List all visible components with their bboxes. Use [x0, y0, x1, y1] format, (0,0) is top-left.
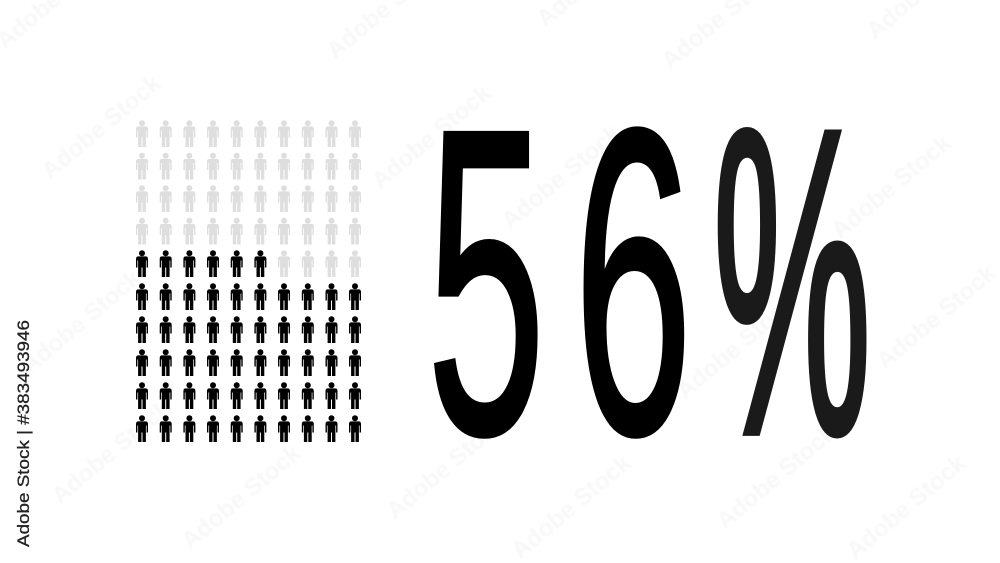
row 4 grey [136, 218, 361, 244]
watermark pattern: Adobe Stock [507, 449, 637, 563]
watermark pattern: Adobe Stock [382, 409, 512, 525]
row 10 black [136, 415, 361, 442]
watermark pattern: Adobe Stock [672, 289, 802, 405]
row 7 black [136, 316, 361, 343]
watermark pattern: Adobe Stock [842, 449, 972, 563]
row 6 black [136, 283, 361, 310]
watermark pattern: Adobe Stock [367, 79, 497, 195]
digit 6: 6 [574, 41, 692, 525]
people chart: 56 of 100 [136, 120, 361, 442]
watermark pattern: Adobe Stock [17, 264, 147, 380]
watermark pattern: Adobe Stock [47, 394, 177, 510]
percent sign: % [713, 41, 871, 525]
watermark pattern: Adobe Stock [827, 129, 957, 245]
row 2 grey [136, 153, 361, 180]
row 9 black [136, 382, 361, 409]
source credit: Adobe Stock | #383493946 [14, 320, 33, 547]
watermark pattern: Adobe Stock [177, 439, 307, 555]
watermark pattern: Adobe Stock [37, 69, 167, 185]
row 5 six black, four grey [136, 250, 361, 277]
percentage value: 56% [427, 41, 871, 525]
row 3 grey [136, 185, 361, 212]
watermark pattern: Adobe Stock [712, 419, 842, 535]
row 8 black [136, 349, 361, 376]
row 1 grey [136, 120, 361, 147]
watermark pattern: Adobe Stock [872, 259, 1000, 375]
watermark pattern: Adobe Stock [497, 119, 627, 235]
digit 5: 5 [427, 41, 545, 525]
